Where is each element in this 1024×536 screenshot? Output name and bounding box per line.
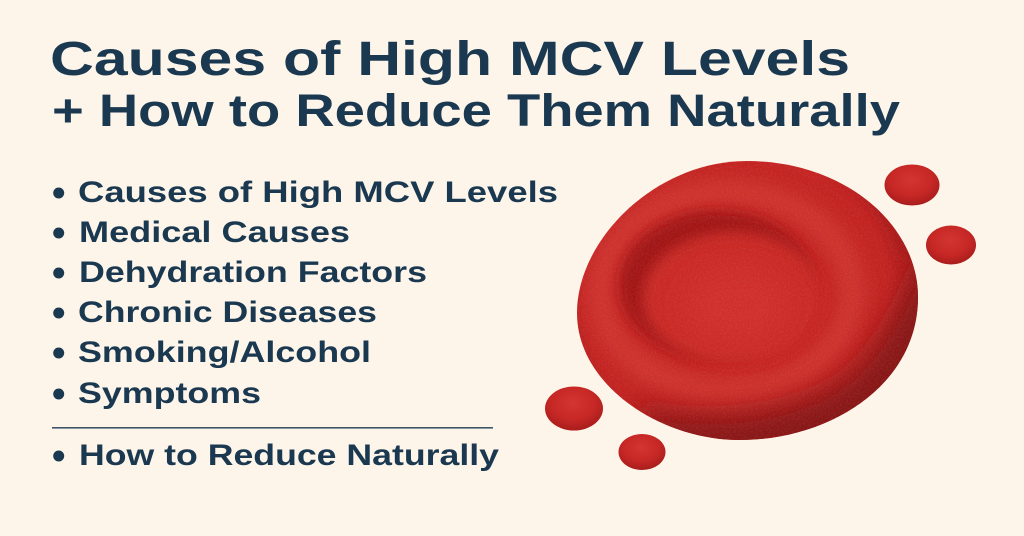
title: + How to Reduce Them Naturally: [52, 85, 900, 136]
title: Causes of High MCV Levels: [50, 33, 850, 86]
icon: large red blood cell: [577, 161, 918, 440]
icon: small cell right: [926, 226, 976, 264]
bullet: Chronic Diseases: Chronic Diseases: [78, 296, 377, 329]
bullet: How to Reduce Naturally: How to Reduce Naturally: [79, 439, 499, 472]
bullet: Causes of High MCV Levels: Causes of High MCV Levels: [78, 176, 558, 209]
icon: small cell bottom left: [545, 386, 603, 430]
bullet: Medical Causes: Medical Causes: [79, 216, 350, 249]
bullet: Dehydration Factors: Dehydration Factors: [79, 256, 427, 289]
bullet: Symptoms: Symptoms: [78, 377, 261, 410]
bullet: Smoking/Alcohol: Smoking/Alcohol: [78, 336, 371, 369]
title: [50, 33, 900, 136]
icon: small cell bottom: [618, 434, 666, 470]
icon: small cell top right: [884, 164, 940, 206]
bullet list: [52, 176, 558, 472]
infographic canvas: [52, 40, 976, 471]
